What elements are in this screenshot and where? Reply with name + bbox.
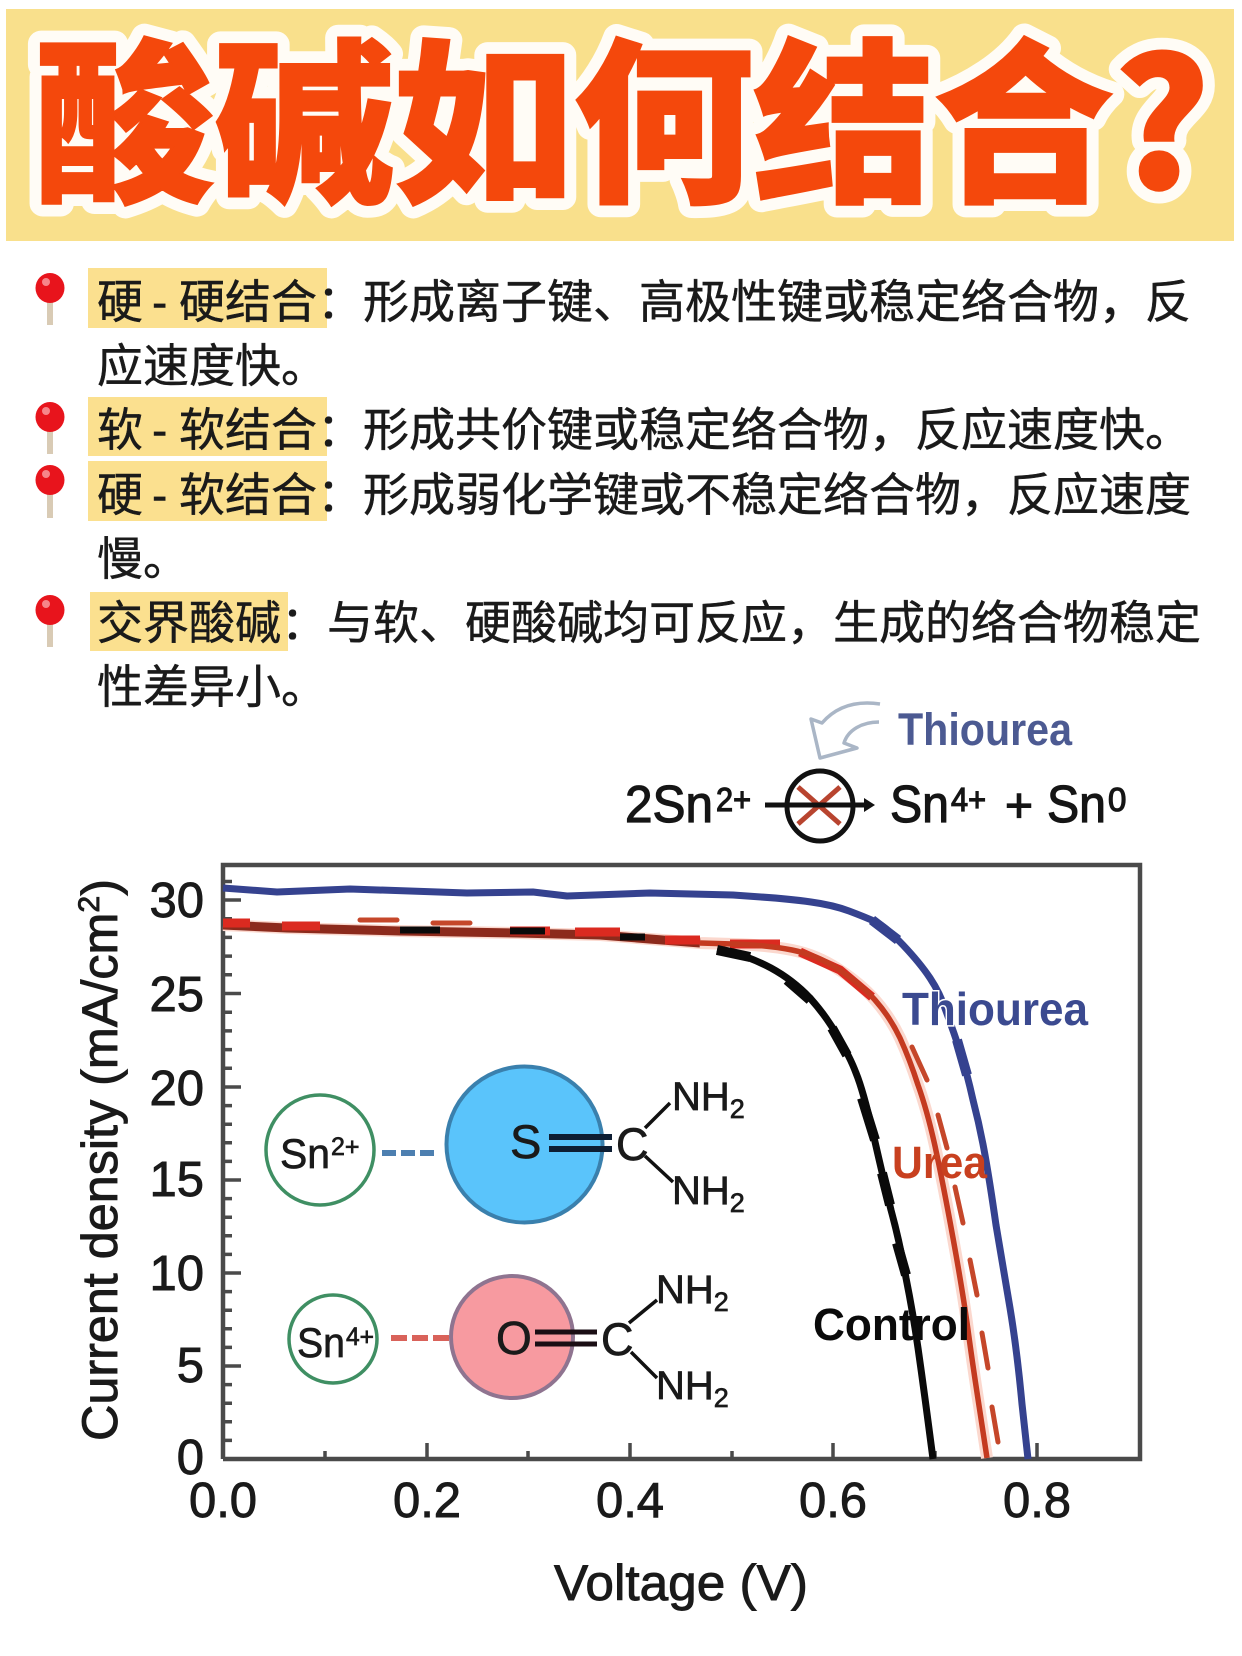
- inset: Sn4+ urea coordination: O: [496, 1312, 532, 1364]
- chart axes and ticks: [223, 865, 1140, 1459]
- inset: Sn4+ urea coordination: [289, 1268, 729, 1413]
- bullet: soft-soft: [36, 397, 1191, 456]
- curve label: Urea: Urea: [892, 1137, 988, 1188]
- inset: Sn2+ thiourea coordination: NH: [672, 1169, 730, 1213]
- y tick labels: 30: [149, 874, 204, 928]
- bullet: borderline: 与软、硬酸碱均可反应，生成的络合物稳定: [327, 597, 1201, 649]
- x tick labels: 0.4: [596, 1474, 664, 1528]
- bullet: hard-soft: 硬: [97, 469, 143, 521]
- bullet: soft-soft: 软结合：: [179, 404, 363, 456]
- bullet: soft-soft: -: [152, 404, 167, 456]
- reaction formula: [625, 703, 1126, 841]
- y tick labels: [149, 874, 204, 1485]
- curve: urea: [223, 920, 998, 1458]
- bullet: borderline: 性差异小。: [97, 661, 327, 713]
- x tick labels: 0.2: [393, 1474, 461, 1528]
- y tick labels: 15: [149, 1153, 204, 1207]
- y tick labels: 10: [149, 1247, 204, 1301]
- y axis title: Current density (mA/cm: [72, 916, 128, 1441]
- bullet: soft-soft: 形成共价键或稳定络合物，反应速度快。: [363, 404, 1191, 456]
- curve: thiourea: [223, 888, 1028, 1459]
- y tick labels: 20: [149, 1062, 204, 1116]
- products: Sn: [890, 776, 949, 834]
- curve: control: [400, 930, 933, 1459]
- products: Sn: [1047, 776, 1106, 834]
- bullet: borderline: 交界酸碱：: [97, 597, 327, 649]
- bullet: hard-hard: -: [152, 276, 167, 328]
- inset: Sn2+ thiourea coordination: Sn: [280, 1130, 330, 1177]
- x tick labels: 0.8: [1003, 1474, 1071, 1528]
- products: [890, 776, 1126, 834]
- y tick labels: 0: [177, 1431, 204, 1485]
- bullet: soft-soft: 软: [97, 404, 143, 456]
- reactant: 2Sn: [625, 776, 713, 834]
- products: 0: [1108, 781, 1126, 818]
- icon: blocked arrow: [765, 771, 875, 841]
- x tick labels: 0.6: [799, 1474, 867, 1528]
- inset: Sn4+ urea coordination: C: [601, 1314, 634, 1365]
- inset: Sn4+ urea coordination: NH: [656, 1364, 714, 1408]
- bullet: hard-soft: 软结合：: [179, 469, 363, 521]
- inset: Sn2+ thiourea coordination: 2: [730, 1188, 745, 1218]
- y axis title: 2: [73, 896, 106, 913]
- bullet: hard-hard: 硬结合：: [179, 276, 363, 328]
- bullet: borderline: [36, 592, 1201, 713]
- inset: Sn2+ thiourea coordination: S: [510, 1115, 541, 1168]
- products: +: [1005, 780, 1033, 833]
- y axis title: ): [72, 879, 128, 896]
- icon: curved arrow: [811, 703, 880, 758]
- bullet: hard-soft: 慢。: [97, 533, 189, 585]
- inset: Sn2+ thiourea coordination: 2: [730, 1094, 745, 1124]
- curve label: Control: Control: [813, 1299, 970, 1350]
- x tick labels: 0.0: [189, 1474, 257, 1528]
- x tick labels: [189, 1474, 1071, 1528]
- inset: Sn4+ urea coordination: 2: [714, 1383, 729, 1413]
- products: 4+: [951, 781, 986, 818]
- bullet: hard-hard: 硬: [97, 276, 143, 328]
- bullet: hard-hard: 应速度快。: [97, 340, 327, 392]
- curve label: Thiourea: Thiourea: [902, 983, 1088, 1035]
- inset: Sn2+ thiourea coordination: [266, 1066, 745, 1222]
- bullet: hard-soft: 形成弱化学键或不稳定络合物，反应速度: [363, 469, 1191, 521]
- inset: Sn4+ urea coordination: 4+: [346, 1323, 374, 1351]
- bullet list: [36, 268, 1201, 713]
- inset: Sn2+ thiourea coordination: 2+: [331, 1133, 360, 1161]
- J-V chart: [72, 865, 1140, 1611]
- bullet: hard-hard: 形成离子键、高极性键或稳定络合物，反: [363, 276, 1191, 328]
- inset: Sn2+ thiourea coordination: NH: [672, 1075, 730, 1119]
- y tick labels: 5: [177, 1339, 204, 1393]
- y tick labels: 25: [149, 968, 204, 1022]
- bullet: hard-soft: [36, 461, 1191, 585]
- bullet: hard-hard: [36, 268, 1191, 392]
- title banner: [6, 0, 1234, 241]
- x axis title: Voltage (V): [554, 1555, 808, 1611]
- inset: Sn4+ urea coordination: 2: [714, 1287, 729, 1317]
- reactant: 2+: [716, 781, 751, 818]
- thiourea label: Thiourea: [898, 704, 1073, 755]
- inset: Sn2+ thiourea coordination: C: [616, 1119, 648, 1170]
- inset: Sn4+ urea coordination: NH: [656, 1268, 714, 1312]
- inset: Sn4+ urea coordination: Sn: [297, 1319, 345, 1366]
- bullet: hard-soft: -: [152, 469, 167, 521]
